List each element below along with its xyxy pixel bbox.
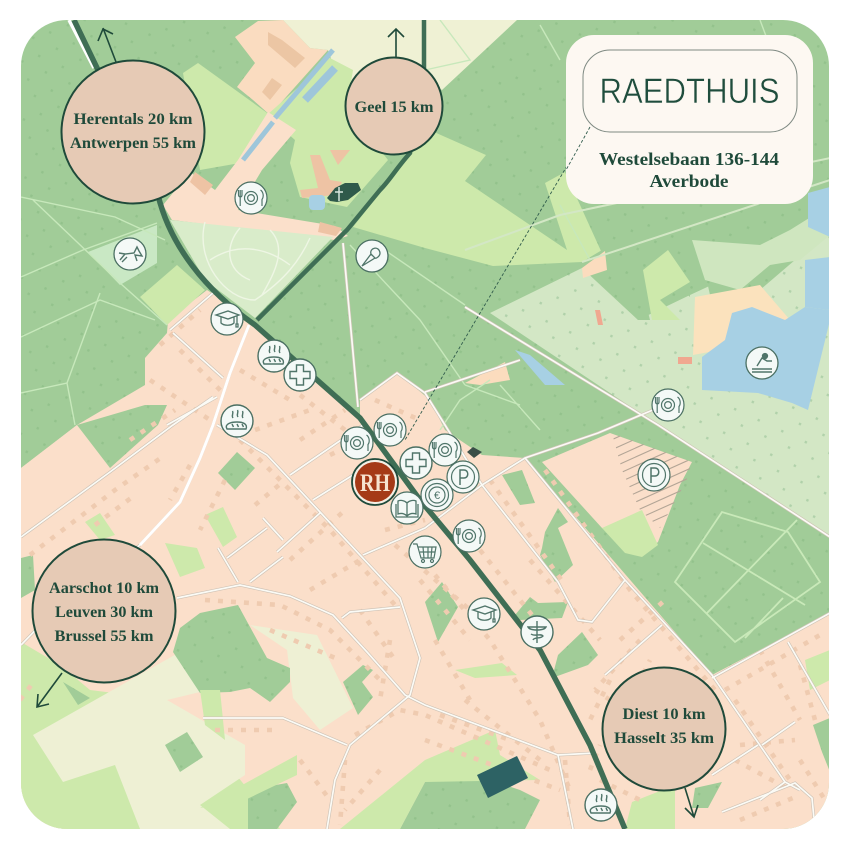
- distance callout: Geel: Geel 15 km: [354, 99, 434, 116]
- small pond: [515, 350, 565, 385]
- distance callout: Herentals / Antwerpen: Herentals 20 km: [74, 111, 193, 128]
- icon: supermarket: [409, 536, 441, 568]
- sand clearing: [693, 285, 790, 355]
- field beside main road: [140, 265, 205, 325]
- south-west field: [21, 642, 280, 829]
- icon: bakery south: [585, 789, 617, 821]
- distance callout: Diest / Hasselt: Hasselt 35 km: [614, 730, 714, 747]
- icon: pharmacy north: [284, 359, 316, 391]
- canal basin: [305, 68, 335, 100]
- icon: school north: [211, 303, 243, 335]
- streets: [21, 243, 830, 829]
- icon: restaurant lake: [652, 389, 684, 421]
- sand west: [465, 251, 607, 385]
- abbey garden: [170, 220, 333, 318]
- icon: restaurant abbey: [235, 182, 267, 214]
- icon: restaurant 2: [374, 414, 406, 446]
- east field: [542, 433, 692, 543]
- north meadow: [183, 63, 270, 170]
- icon: ice cream: [356, 240, 388, 272]
- abbey meadow: [267, 57, 388, 207]
- icon: bakery west: [221, 405, 253, 437]
- logo wordmark: RAEDTHUIS: [600, 72, 780, 111]
- streets outline: [21, 243, 830, 829]
- icon: swimming: [746, 347, 778, 379]
- distance callout: Herentals / Antwerpen: Antwerpen 55 km: [70, 135, 196, 152]
- residential area: [21, 290, 830, 829]
- icon: restaurant 4: [453, 520, 485, 552]
- farm buildings: [262, 32, 305, 100]
- main road: [74, 20, 625, 829]
- heath: [490, 230, 830, 537]
- address: [599, 149, 779, 191]
- distance callout: Aarschot / Leuven / Brussel: Brussel 55 km: [54, 628, 154, 645]
- abbey buildings: [190, 150, 350, 236]
- icon: small landmark: [467, 447, 482, 458]
- icon: parking centre: [447, 461, 479, 493]
- main road white edge: [69, 20, 94, 68]
- icon: library: [391, 492, 423, 524]
- icon: parking east: [638, 459, 670, 491]
- canals: [243, 50, 333, 160]
- icon: bank: [421, 479, 453, 511]
- icon: horse: [114, 238, 146, 270]
- water north-east: [805, 187, 830, 310]
- dashed connector over panel: [566, 127, 590, 170]
- abbey grounds: [163, 112, 348, 240]
- clearing: [88, 225, 157, 285]
- field next to parking: [602, 510, 658, 557]
- address panel: [566, 35, 813, 204]
- address: Westelsebaan 136-144: [599, 149, 779, 169]
- road along forest: [465, 158, 830, 262]
- distance callout: Herentals / Antwerpen: [62, 28, 204, 204]
- wide pale road: [140, 325, 249, 545]
- icon: school south: [468, 598, 500, 630]
- forest strip over heath: [565, 172, 794, 320]
- location marker RH: [352, 459, 398, 505]
- location marker RH: RH: [360, 470, 390, 497]
- garden paths: [203, 222, 310, 300]
- pale meadow east: [692, 219, 824, 289]
- forest grid: [675, 512, 820, 642]
- dashed connector line: [405, 127, 590, 440]
- icon: bakery north: [258, 340, 290, 372]
- distance callout: Aarschot / Leuven / Brussel: [32, 540, 176, 707]
- icon: restaurant 3: [429, 434, 461, 466]
- forest patch west: [77, 405, 167, 468]
- icon: bank: €: [434, 490, 440, 502]
- striped parking: [614, 436, 690, 528]
- distance callout: Diest / Hasselt: [602, 668, 726, 817]
- red buildings: [595, 310, 692, 364]
- large meadow: [353, 128, 602, 266]
- farm at abbey: [235, 20, 328, 115]
- distance callout: Diest / Hasselt: Diest 10 km: [622, 706, 706, 723]
- dark water basin: [477, 756, 528, 798]
- logo frame: [583, 50, 797, 132]
- icon: caduceus: [521, 616, 553, 648]
- field west: [21, 425, 77, 468]
- forest patches: [21, 452, 830, 829]
- distance callout: Aarschot / Leuven / Brussel: Aarschot 10 km: [49, 580, 159, 597]
- address: Averbode: [650, 171, 729, 191]
- distance callout: Aarschot / Leuven / Brussel: Leuven 30 km: [55, 604, 153, 621]
- road to Geel: [257, 20, 424, 320]
- lake: [702, 307, 830, 410]
- icon: abbey church: [327, 183, 361, 202]
- forest trails: [21, 20, 775, 430]
- icon: pharmacy centre: [400, 447, 432, 479]
- icon: restaurant 1: [341, 427, 373, 459]
- south-west farmland: [33, 652, 245, 829]
- south farmland: [250, 625, 353, 730]
- cream farmland top: [283, 20, 517, 90]
- abbey pond: [309, 195, 325, 210]
- light field patches: [85, 507, 830, 829]
- pale green meadow: [643, 250, 690, 320]
- houses along roads: [20, 310, 825, 825]
- distance callout: Geel: [346, 29, 442, 154]
